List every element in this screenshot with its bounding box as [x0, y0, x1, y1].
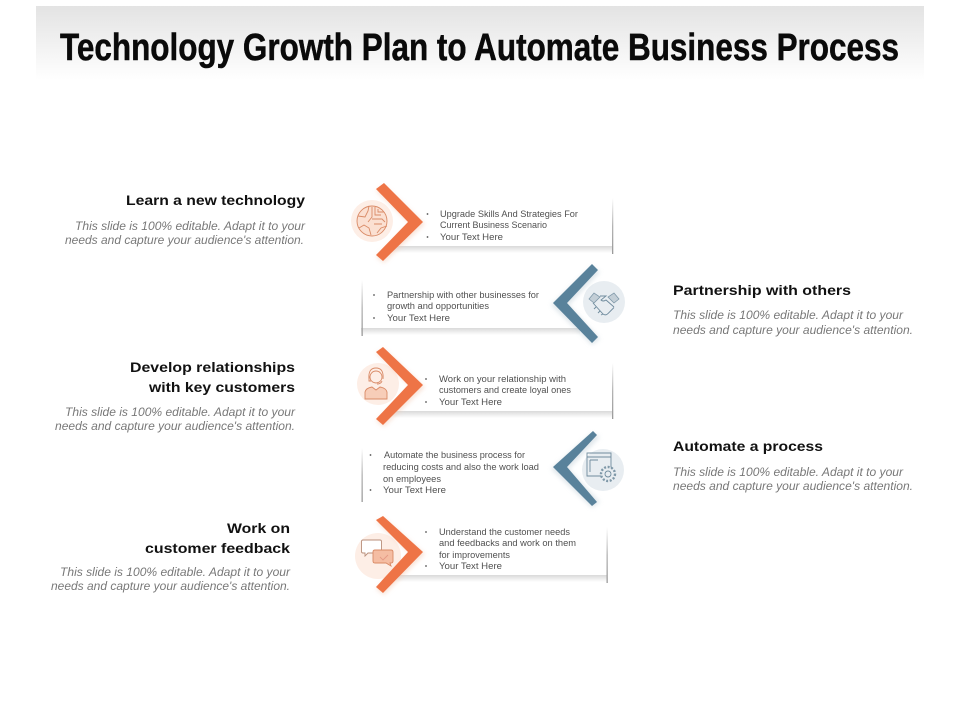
chevron	[553, 264, 598, 343]
bullet list: on employees	[383, 474, 442, 484]
left text: learn a new technology	[65, 192, 306, 247]
bullet list: Your Text Here	[440, 232, 503, 242]
left text: learn a new technology: This slide is 100% editable. Adapt it to your	[75, 221, 306, 233]
chevron	[376, 516, 423, 593]
left text: customer feedback: This slide is 100% editable. Adapt it to your	[60, 567, 291, 579]
icon: customer agent	[357, 363, 399, 405]
left text: customer feedback: customer feedback	[145, 540, 290, 556]
chevron	[376, 347, 423, 425]
right text: partnership with others: Partnership with others	[673, 282, 851, 298]
right text: automate a process	[673, 438, 913, 493]
bullet list: Current Business Scenario	[440, 220, 547, 230]
left text: customer feedback: Work on	[227, 520, 290, 536]
bullet list	[427, 209, 578, 242]
panel: step 4 automate	[362, 431, 624, 508]
bullet list: growth and opportunities	[387, 301, 490, 311]
bullet list: Your Text Here	[383, 485, 446, 495]
icon: handshake	[583, 281, 625, 323]
icon: window with gear	[582, 449, 624, 491]
panel: step 2 partnership	[361, 264, 625, 345]
right text: automate a process: needs and capture your audience's attention.	[673, 481, 913, 493]
bullet list: Work on your relationship with	[439, 374, 566, 384]
bullet list	[425, 374, 571, 407]
right text: automate a process: Automate a process	[673, 438, 823, 454]
left text: develop relationships: needs and capture your audience's attention.	[55, 421, 295, 433]
chevron	[376, 183, 423, 261]
bullet list: Your Text Here	[439, 561, 502, 571]
right text: partnership with others: This slide is 100% editable. Adapt it to your	[673, 310, 904, 322]
icon: speech bubbles	[355, 533, 401, 579]
right text: partnership with others: needs and capture your audience's attention.	[673, 325, 913, 337]
bullet list	[425, 527, 576, 571]
left text: learn a new technology: needs and capture your audience's attention.	[65, 235, 304, 247]
left text: develop relationships	[55, 359, 296, 433]
panel: step 3 relationships	[357, 347, 613, 427]
bullet list: reducing costs and also the work load	[383, 462, 539, 472]
bullet list: Upgrade Skills And Strategies For	[440, 209, 578, 219]
panel: step 5 feedback	[355, 516, 608, 595]
bullet list	[373, 290, 539, 323]
bullet list: Your Text Here	[387, 313, 450, 323]
bullet list: Partnership with other businesses for	[387, 290, 539, 300]
bullet list: customers and create loyal ones	[439, 385, 571, 395]
bullet list: Understand the customer needs	[439, 527, 571, 537]
chevron	[553, 431, 597, 506]
icon: technology globe	[351, 200, 393, 242]
left text: customer feedback: needs and capture your audience's attention.	[51, 581, 290, 593]
bullet list: Automate the business process for	[384, 450, 525, 460]
right text: automate a process: This slide is 100% editable. Adapt it to your	[673, 467, 904, 479]
title band	[36, 6, 924, 80]
left text: develop relationships: with key customers	[148, 379, 295, 395]
left text: develop relationships: This slide is 100% editable. Adapt it to your	[65, 407, 296, 419]
left text: customer feedback	[51, 520, 291, 593]
right text: partnership with others	[673, 282, 913, 337]
panel: step 1 upgrade skills	[351, 183, 613, 263]
bullet list	[370, 450, 539, 495]
left text: learn a new technology: Learn a new technology	[126, 192, 305, 208]
bullet list: for improvements	[439, 550, 511, 560]
bullet list: and feedbacks and work on them	[439, 538, 576, 548]
left text: develop relationships: Develop relationships	[130, 359, 295, 375]
bullet list: Your Text Here	[439, 397, 502, 407]
